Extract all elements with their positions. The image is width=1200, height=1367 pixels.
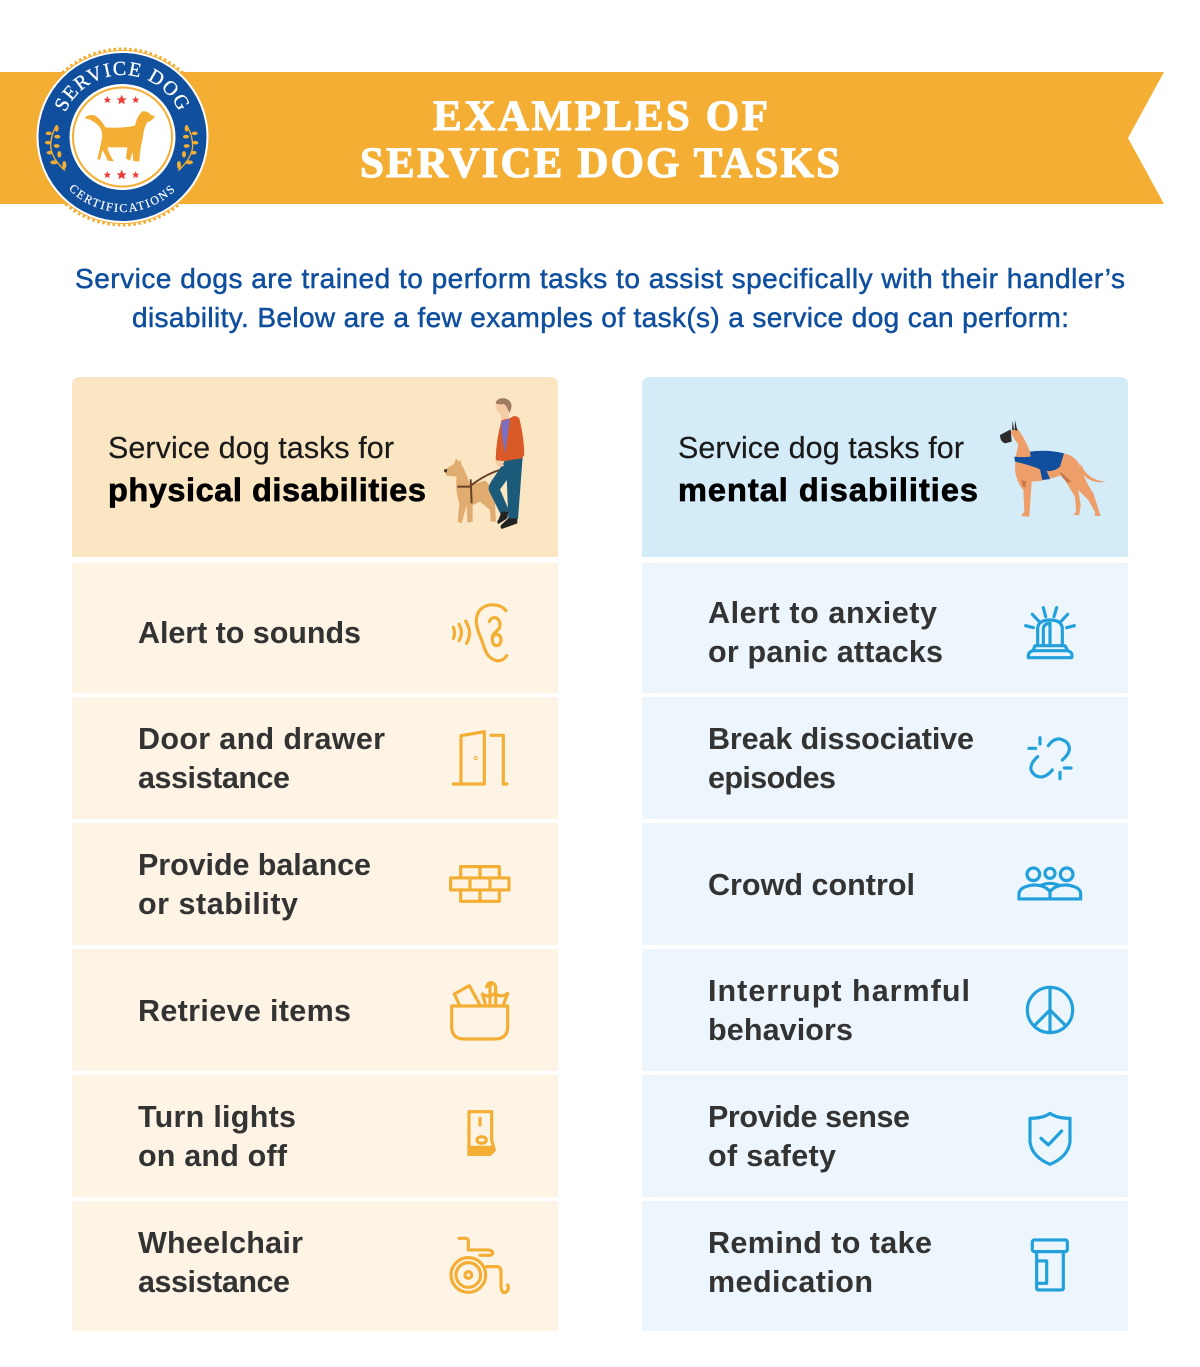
row: break dissociative episodes: Break dissociative [708,722,974,756]
row: provide balance or stability: Provide balance [138,848,371,882]
icon: pill bottle [1032,1240,1067,1290]
row: door and drawer assistance: assistance [138,761,290,795]
icon: broken link [1029,738,1071,779]
row: interrupt harmful behaviors: behaviors [708,1013,853,1047]
title: EXAMPLES OF [433,93,768,140]
banner ribbon [0,72,1164,204]
row: wheelchair assistance: Wheelchair [138,1226,303,1260]
icon: ear [453,605,507,661]
row: retrieve items: Retrieve items [138,994,351,1028]
row: turn lights on and off [72,1075,558,1197]
row: wheelchair assistance [72,1201,558,1331]
intro text [75,263,1125,333]
row: remind to take medication: Remind to take [708,1226,932,1260]
illustration: dog wearing service vest [1000,420,1106,517]
row: crowd control [642,823,1128,945]
header: physical disabilities: physical disabilities [108,472,426,508]
icon: shield with check [1030,1113,1070,1164]
icon: door [453,732,507,784]
header: mental disabilities: Service dog tasks for [678,431,964,465]
title: SERVICE DOG TASKS [360,140,840,187]
icon: brick wall [451,867,509,901]
row: break dissociative episodes: episodes [708,761,836,795]
row: provide balance or stability: or stability [138,887,298,921]
row: provide balance or stability [72,823,558,945]
badge: service dog certifications: SERVICE DOG [55,62,190,112]
header: mental disabilities: mental disabilities [678,472,978,508]
row: provide sense of safety: Provide sense [708,1100,910,1134]
row: alert to anxiety or panic attacks: or panic attacks [708,635,943,669]
header: physical disabilities: Service dog tasks for [108,431,394,465]
header: physical disabilities [72,377,558,557]
row: crowd control: Crowd control [708,868,915,902]
row: turn lights on and off: Turn lights [138,1100,296,1134]
intro text: Service dogs are trained to perform tasks to assist specifically with their handler’s [75,263,1125,294]
header: mental disabilities [642,377,1128,557]
icon: wheelchair [451,1238,508,1293]
row: break dissociative episodes [642,697,1128,819]
row: door and drawer assistance: Door and drawer [138,722,385,756]
intro text: disability. Below are a few examples of task(s) a service dog can perform: [132,302,1069,333]
row: provide sense of safety [642,1075,1128,1197]
row: alert to anxiety or panic attacks [642,563,1128,693]
row: alert to anxiety or panic attacks: Alert to anxiety [708,596,937,630]
icon: peace sign [1027,987,1073,1033]
badge: service dog certifications: CERTIFICATIONS [70,185,174,212]
row: alert to sounds [72,563,558,693]
badge: service dog certifications [36,48,208,226]
panel: mental disabilities [642,377,1128,1331]
icon: crowd [1019,868,1081,899]
row: interrupt harmful behaviors: Interrupt harmful [708,974,970,1008]
row: door and drawer assistance [72,697,558,819]
row: retrieve items [72,949,558,1071]
row: wheelchair assistance: assistance [138,1265,290,1299]
icon: siren [1026,608,1074,658]
row: interrupt harmful behaviors [642,949,1128,1071]
icon: basket of items [452,983,508,1039]
row: alert to sounds: Alert to sounds [138,616,361,650]
row: remind to take medication [642,1201,1128,1331]
title [360,93,840,187]
row: remind to take medication: medication [708,1265,873,1299]
row: provide sense of safety: of safety [708,1139,836,1173]
icon: light switch [469,1112,494,1154]
illustration: man walking service dog [444,398,524,529]
row: turn lights on and off: on and off [138,1139,288,1173]
panel: physical disabilities [72,377,558,1331]
